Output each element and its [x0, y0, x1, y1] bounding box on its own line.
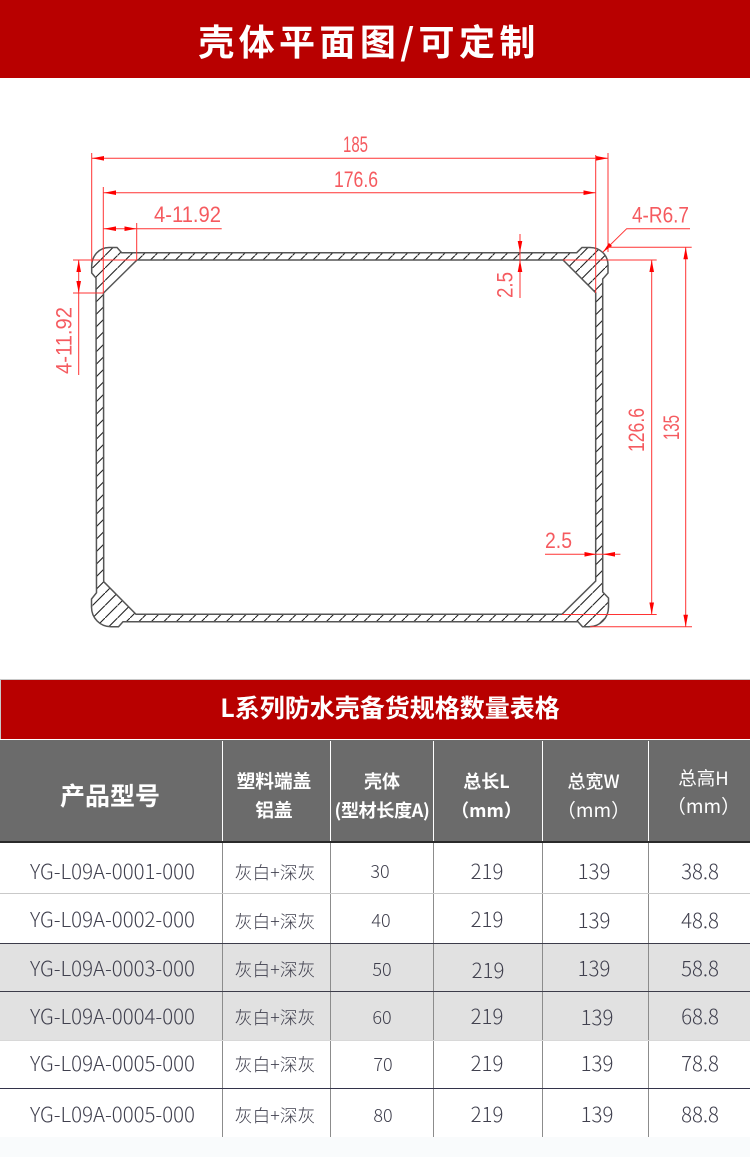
table row 2: 灰白+深灰	[235, 908, 315, 934]
enclosure profile	[92, 248, 608, 627]
dimension: inner width 176.6	[103, 155, 596, 293]
table row 2: 139	[578, 904, 610, 934]
table row 2: 48.8	[681, 904, 719, 934]
dimension: wall thickness 2.5 (top): 2.5	[493, 272, 518, 298]
table row 1	[0, 843, 750, 894]
table row 6: YG-L09A-0005-000	[30, 1098, 195, 1128]
table row 5: 灰白+深灰	[235, 1051, 315, 1077]
table row 4: YG-L09A-0004-000	[30, 1000, 195, 1030]
table row 3: 58.8	[681, 952, 719, 982]
table row 2: YG-L09A-0002-000	[30, 903, 195, 933]
dimension: chamfer height 4-11.92	[52, 260, 137, 375]
header: total width unit: （mm）	[557, 796, 630, 823]
dimension: overall width 185: 185	[343, 132, 368, 157]
table row 1: YG-L09A-0001-000	[30, 855, 195, 885]
table row 4: 灰白+深灰	[235, 1004, 315, 1030]
dimension: wall thickness 2.5 (side): 2.5	[545, 528, 572, 553]
table row 3: 50	[372, 956, 392, 982]
dimension: chamfer height 4-11.92: 4-11.92	[52, 307, 76, 374]
header: aluminium cover: 铝盖	[255, 796, 293, 823]
table row 5: YG-L09A-0005-000	[30, 1047, 195, 1077]
header: total length unit: （mm）	[451, 797, 522, 823]
dimension: chamfer width 4-11.92	[104, 202, 222, 260]
header: total length: 总长L	[463, 768, 510, 794]
table row 4	[0, 991, 750, 1041]
header bottom rule	[0, 841, 750, 843]
table row 1: 30	[370, 858, 390, 884]
table row 4: 139	[581, 1001, 613, 1031]
table row 4: 219	[471, 1000, 503, 1030]
table row 4: 60	[372, 1004, 392, 1030]
title banner	[0, 0, 750, 78]
dimension: overall width 185	[92, 132, 608, 262]
table row 3: YG-L09A-0003-000	[30, 952, 195, 982]
table row 2: 219	[471, 903, 503, 933]
header: shell: 壳体	[364, 768, 400, 794]
dimension: overall height 135	[590, 247, 692, 627]
table row 5	[0, 1041, 750, 1088]
header: total width: 总宽W	[567, 768, 620, 794]
table row 3: 219	[472, 954, 504, 984]
table title bar	[0, 679, 750, 739]
table row 4: 68.8	[681, 1000, 719, 1030]
table row 6: 139	[581, 1098, 613, 1128]
table row 1: 灰白+深灰	[235, 859, 315, 885]
table row 6: 219	[471, 1098, 503, 1128]
table row 3	[0, 943, 750, 992]
dimension: wall thickness 2.5 (side)	[545, 528, 620, 557]
dimension: corner radius 4-R6.7: 4-R6.7	[632, 202, 689, 228]
table row 5: 70	[373, 1051, 393, 1077]
table row 6: 88.8	[681, 1098, 719, 1128]
dimension: inner width 176.6: 176.6	[334, 167, 378, 192]
table row 2	[0, 894, 750, 943]
table row 5: 139	[581, 1047, 613, 1077]
dimension: inner height 126.6	[562, 260, 657, 614]
table row 1: 139	[578, 855, 610, 885]
technical drawing: enclosure cross-section	[52, 132, 692, 628]
dimension: wall thickness 2.5 (top)	[493, 234, 522, 298]
header: profile length: (型材长度A)	[334, 797, 430, 823]
table header row	[0, 740, 750, 841]
header: total height unit: （mm）	[667, 792, 740, 819]
footer strip	[0, 1137, 750, 1157]
table row 5: 78.8	[681, 1047, 719, 1077]
dimension: corner radius 4-R6.7	[603, 202, 690, 252]
dimension: chamfer width 4-11.92: 4-11.92	[154, 202, 221, 227]
table row 3: 139	[578, 952, 610, 982]
table row 5: 219	[471, 1047, 503, 1077]
table title: L系列防水壳备货规格数量表格	[220, 689, 560, 725]
dimension: inner height 126.6: 126.6	[624, 408, 649, 452]
table row 1: 219	[471, 855, 503, 885]
table row 2: 40	[371, 907, 391, 933]
dimension: overall height 135: 135	[659, 415, 684, 440]
table row 3: 灰白+深灰	[235, 956, 315, 982]
table row 6: 灰白+深灰	[235, 1102, 315, 1128]
header: total height: 总高H	[678, 765, 729, 791]
table row 6	[0, 1088, 750, 1138]
header: end cover: 塑料端盖	[237, 767, 311, 794]
table row 6: 80	[373, 1102, 393, 1128]
header: product model: 产品型号	[60, 777, 160, 813]
title: 壳体平面图/可定制	[198, 14, 540, 66]
table row 1: 38.8	[681, 855, 719, 885]
